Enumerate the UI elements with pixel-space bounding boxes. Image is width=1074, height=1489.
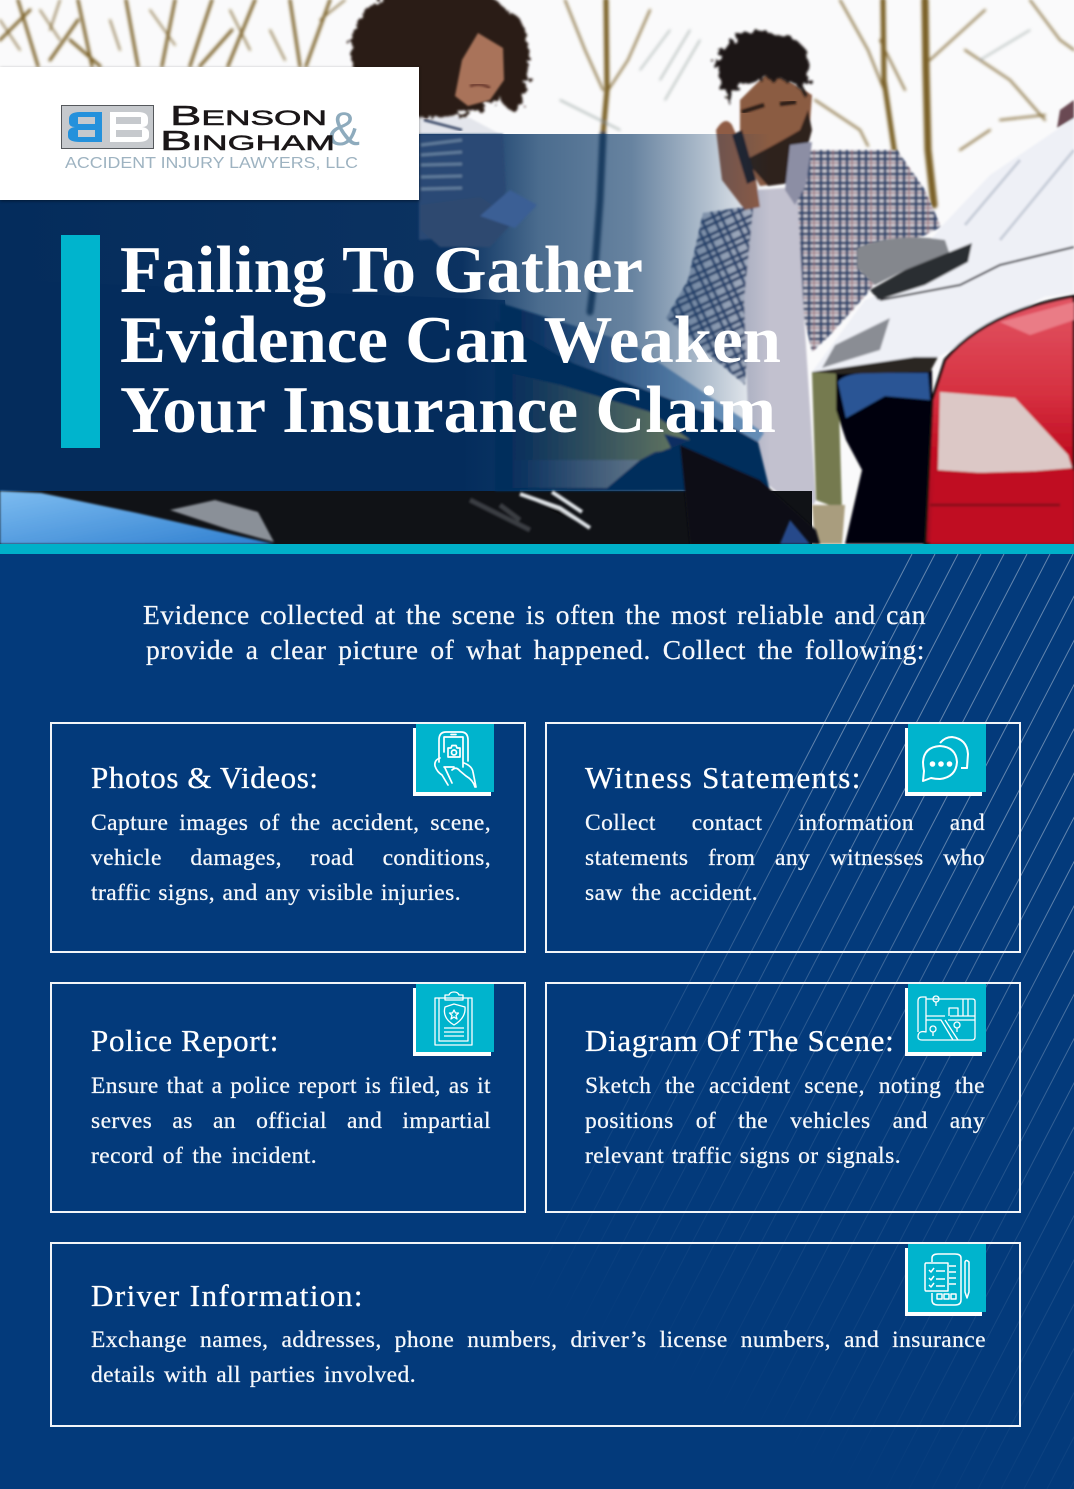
diagonal line pattern [575, 554, 1074, 1489]
logo BB mark [62, 106, 154, 148]
title text [120, 233, 781, 447]
heading: Police Report: [91, 1023, 279, 1058]
icon: phone camera [413, 724, 494, 796]
body text: Collect contact information and [585, 810, 985, 836]
teal divider band [0, 544, 1074, 554]
heading: Diagram Of The Scene: [585, 1023, 894, 1058]
title text: Evidence Can Weaken [120, 303, 781, 377]
body text: record of the incident. [91, 1143, 317, 1169]
logo wordmark: B ENSON [170, 100, 327, 131]
navy overlay [0, 134, 770, 491]
body text [585, 810, 985, 906]
heading: Driver Information: [91, 1278, 364, 1313]
bare trees [0, 0, 1074, 312]
body text: Exchange names, addresses, phone numbers, driver’s license numbers, and insurance [91, 1327, 986, 1353]
icon: checklist phone and pen [905, 1244, 986, 1316]
body text: vehicle damages, road conditions, [91, 845, 491, 871]
panel: photos and videos [50, 722, 526, 953]
title with teal accent bar [61, 235, 781, 448]
body text [585, 1073, 985, 1169]
intro paragraph [143, 599, 926, 666]
body text: saw the accident. [585, 880, 758, 906]
body text: positions of the vehicles and any [585, 1108, 985, 1134]
body text: statements from any witnesses who [585, 845, 985, 871]
heading: Photos & Videos: [91, 760, 319, 795]
body text: Ensure that a police report is filed, as it [91, 1073, 491, 1099]
icon: speech bubbles [905, 724, 986, 796]
logo wordmark [65, 100, 360, 172]
heading: Witness Statements: [585, 760, 862, 795]
logo panel [0, 67, 419, 200]
woman looking at phone [351, 0, 529, 134]
intro paragraph: Evidence collected at the scene is often the most reliable and can [143, 599, 926, 630]
body text [91, 1327, 986, 1388]
panel: diagram of the scene [545, 982, 1021, 1213]
wrecked silver car on right [812, 100, 1074, 544]
title text: Your Insurance Claim [120, 373, 776, 447]
body text [91, 1073, 491, 1169]
body text: serves as an official and impartial [91, 1108, 491, 1134]
damaged blue car and crumpled hood [0, 491, 812, 544]
body text: relevant traffic signs or signals. [585, 1143, 901, 1169]
panel: witness statements [545, 722, 1021, 953]
panel: driver information [50, 1242, 1021, 1427]
woman's jacket, hand and phone under overlay [419, 134, 537, 247]
title text: Failing To Gather [120, 235, 643, 307]
body text: Capture images of the accident, scene, [91, 810, 491, 836]
hero photo: two drivers after a car collision [0, 0, 1074, 544]
teal accent bar [61, 235, 100, 448]
icon: scene map [905, 984, 986, 1056]
logo wordmark: B INGHAM [160, 125, 335, 156]
man on the phone in plaid shirt [666, 70, 941, 516]
body text: traffic signs, and any visible injuries. [91, 880, 461, 906]
body text: Sketch the accident scene, noting the [585, 1073, 985, 1099]
logo wordmark: ACCIDENT INJURY LAWYERS, LLC [65, 155, 358, 172]
icon: police clipboard [413, 984, 494, 1056]
body text [90, 810, 491, 906]
logo wordmark: & [328, 102, 360, 155]
dark hood base beneath overlay [0, 280, 520, 491]
intro paragraph: provide a clear picture of what happened. Collect the following: [146, 634, 925, 665]
panel: police report [50, 982, 526, 1213]
body text: details with all parties involved. [91, 1362, 416, 1388]
